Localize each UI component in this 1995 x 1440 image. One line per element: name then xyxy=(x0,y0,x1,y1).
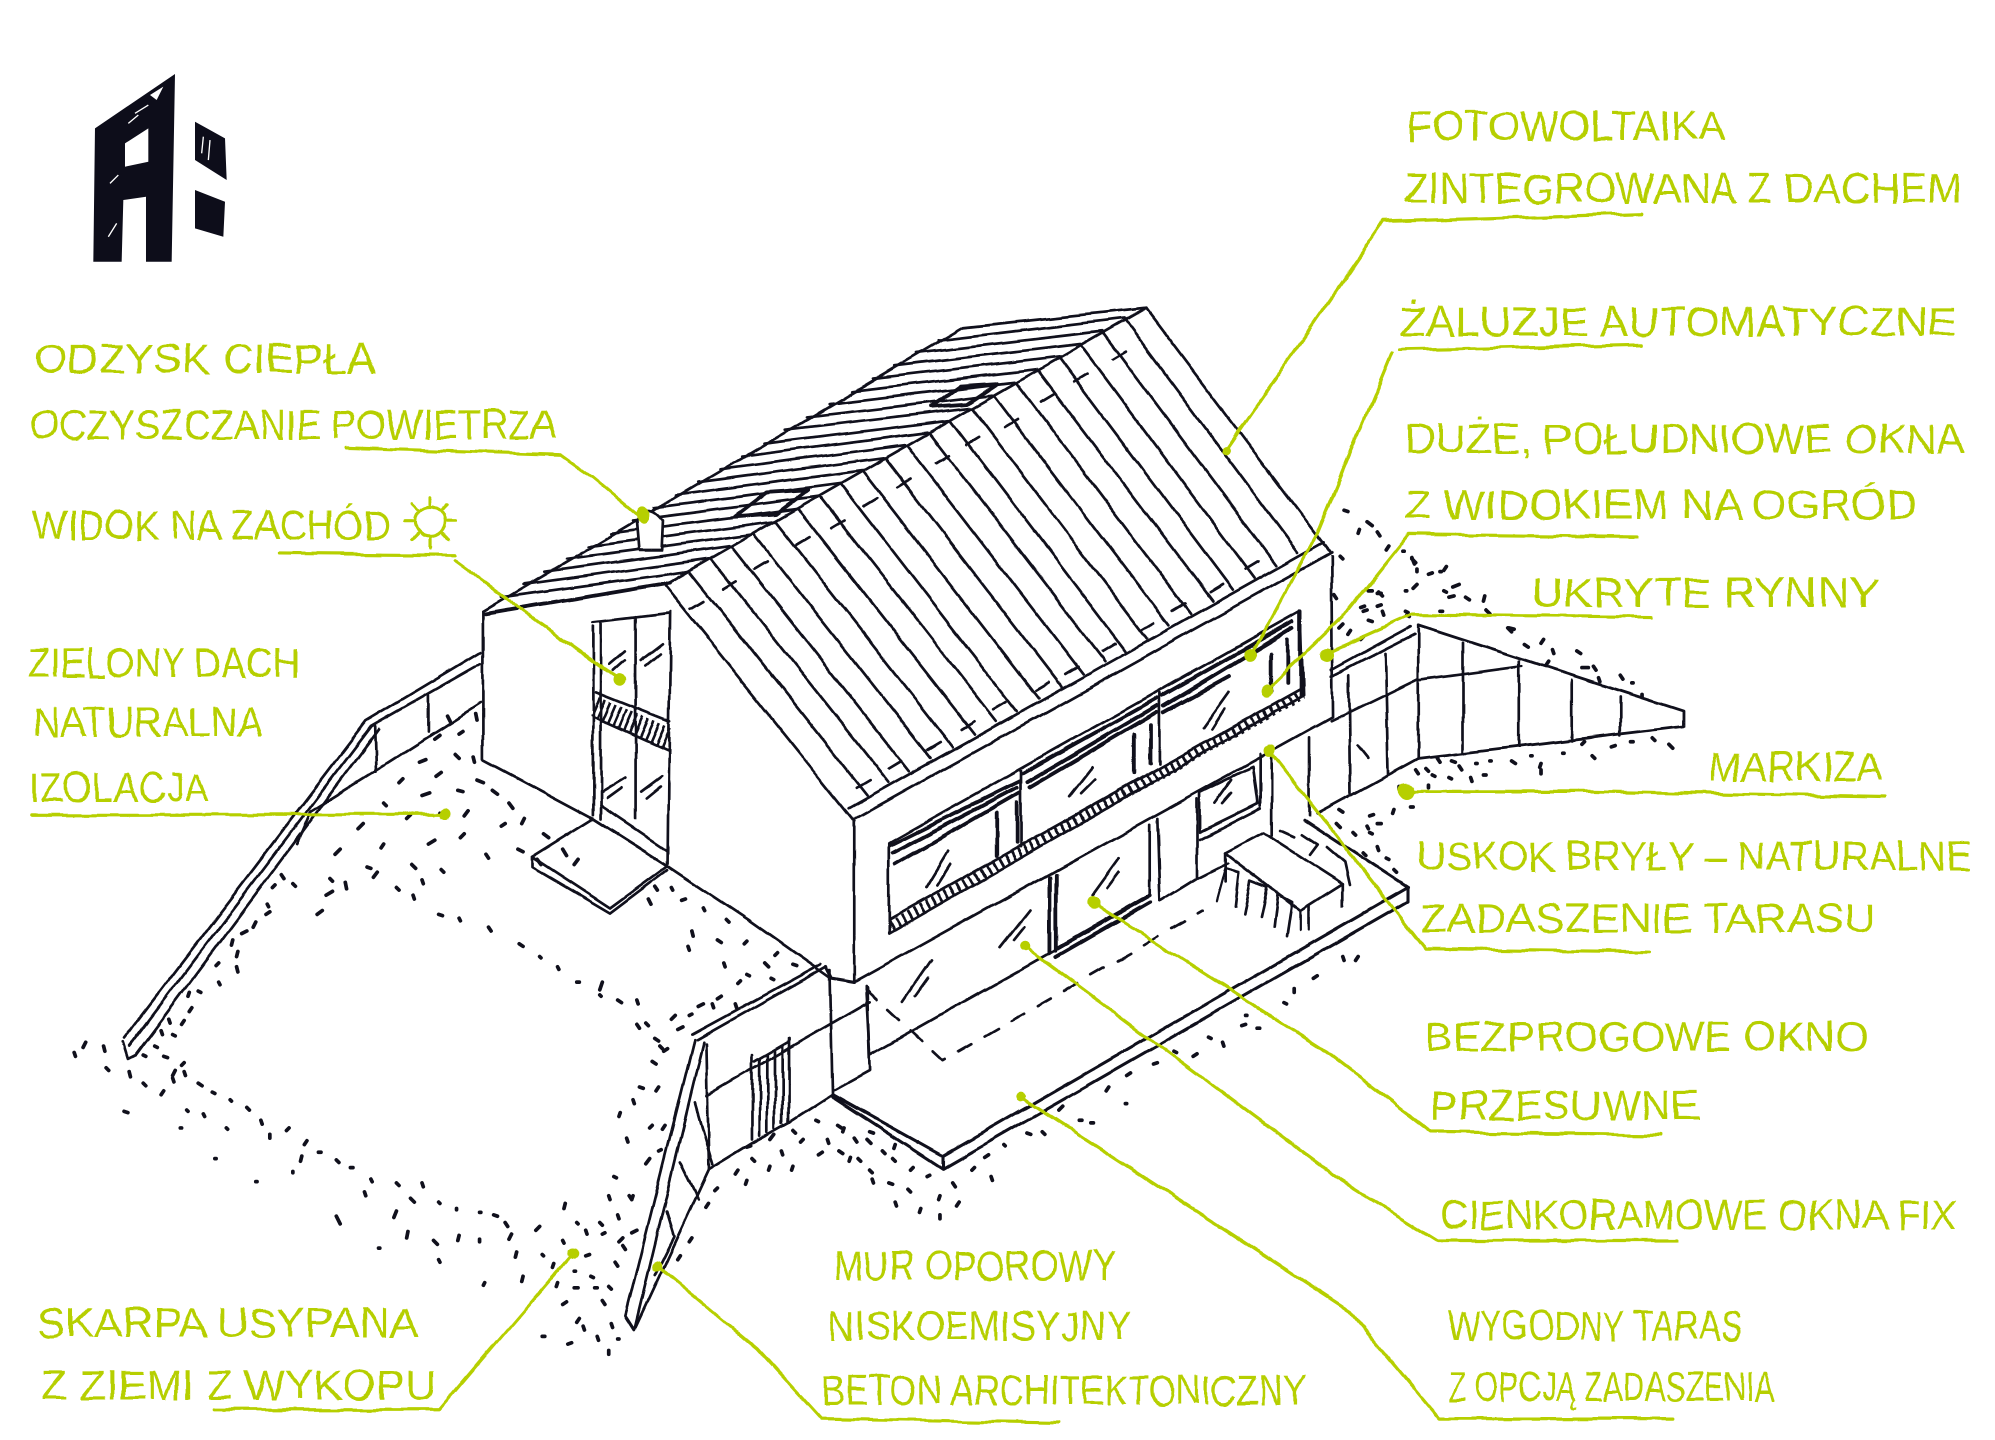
terrace slab xyxy=(833,820,1408,1169)
terrace table and chairs xyxy=(1216,830,1350,936)
callout: large south windows: Z WIDOKIEM NA OGRÓD xyxy=(1405,481,1917,528)
callout: green roof: NATURALNA xyxy=(32,699,263,746)
icon: sun xyxy=(405,496,455,548)
retaining wall: front with stair xyxy=(625,964,870,1330)
callout: building offset: USKOK BRYŁY – NATURALNE xyxy=(1417,832,1972,879)
callout: thin-frame windows xyxy=(1019,940,1957,1241)
gravel and ground specks xyxy=(74,714,662,1285)
callout: hidden gutters xyxy=(1320,569,1879,661)
callout: retaining wall: BETON ARCHITEKTONICZNY xyxy=(822,1367,1307,1414)
callout: automatic blinds: ŻALUZJE AUTOMATYCZNE xyxy=(1400,298,1957,345)
callout: heat recovery: ODZYSK CIEPŁA xyxy=(34,335,375,382)
callout: building offset: ZADASZENIE TARASU xyxy=(1420,895,1875,942)
callout: sliding door: PRZESUWNE xyxy=(1430,1082,1700,1129)
logo: house letter A xyxy=(93,74,227,262)
callout: hidden gutters: UKRYTE RYNNY xyxy=(1531,569,1879,616)
callout: automatic blinds xyxy=(1244,298,1957,663)
roof: hatched rear slope xyxy=(483,308,1146,614)
roof: photovoltaic front slope xyxy=(665,308,1331,821)
callout: sliding door xyxy=(1088,897,1868,1135)
retaining wall: garden side xyxy=(123,652,481,1059)
retaining wall: east side with planted triangle xyxy=(1317,625,1683,813)
callout: embankment: SKARPA USYPANA xyxy=(37,1299,419,1346)
roof: skylights xyxy=(734,384,998,517)
upper storey wall xyxy=(854,556,1333,982)
callout: thin-frame windows: CIENKORAMOWE OKNA FIX xyxy=(1440,1191,1957,1238)
callout: green roof: IZOLACJA xyxy=(29,764,210,811)
automatic blinds xyxy=(890,622,1293,865)
callout: building offset xyxy=(1264,745,1972,952)
callout: terrace xyxy=(1015,1092,1775,1419)
callout: awning: MARKIZA xyxy=(1709,743,1883,790)
callout: sliding door: BEZPROGOWE OKNO xyxy=(1425,1013,1868,1060)
ground floor facade xyxy=(866,738,1310,1060)
west gable wall xyxy=(483,611,854,982)
callout: retaining wall xyxy=(653,1242,1307,1422)
callout: green roof: ZIELONY DACH xyxy=(28,639,299,686)
chimney vent xyxy=(637,511,662,550)
callout: photovoltaics: ZINTEGROWANA Z DACHEM xyxy=(1403,164,1962,211)
entrance step xyxy=(532,818,668,913)
callout: retaining wall: NISKOEMISYJNY xyxy=(828,1302,1131,1349)
callout: green roof xyxy=(28,639,451,820)
isometric house drawing xyxy=(123,308,1683,1330)
callout: west view: WIDOK NA ZACHÓD xyxy=(32,501,391,548)
callout: embankment xyxy=(37,1248,578,1410)
callout: photovoltaics xyxy=(1222,102,1962,455)
callout: terrace: Z OPCJĄ ZADASZENIA xyxy=(1448,1363,1775,1410)
callout: terrace: WYGODNY TARAS xyxy=(1448,1302,1743,1349)
callout: embankment: Z ZIEMI Z WYKOPU xyxy=(41,1362,436,1409)
callout: west view xyxy=(32,496,625,686)
callout: retaining wall: MUR OPOROWY xyxy=(833,1242,1116,1289)
callout: awning xyxy=(1398,743,1886,799)
callout: heat recovery xyxy=(31,335,649,524)
ribbon window with louvres xyxy=(889,611,1303,934)
callout: large south windows: DUŻE, POŁUDNIOWE OKNA xyxy=(1405,415,1964,462)
callout: photovoltaics: FOTOWOLTAIKA xyxy=(1407,102,1725,149)
callout: large south windows xyxy=(1260,415,1964,697)
callout: heat recovery: OCZYSZCZANIE POWIETRZA xyxy=(31,401,556,448)
